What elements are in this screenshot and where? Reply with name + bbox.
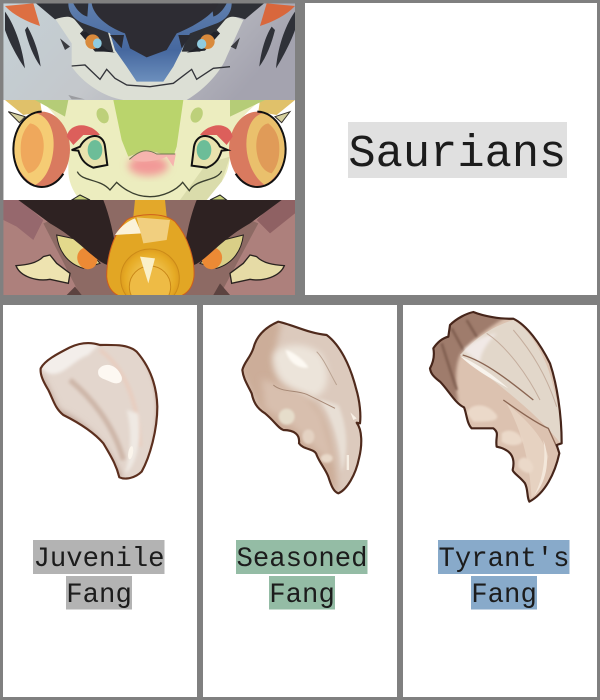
panel: juvenile fang (3, 305, 197, 697)
label: Tyrant's Fang: Tyrant's (438, 544, 570, 575)
label: Tyrant's Fang: Fang (471, 580, 537, 611)
panel: saurians title (305, 3, 597, 295)
label: Seasoned Fang (236, 540, 368, 611)
portrait: golden crest saurian (4, 200, 295, 295)
label: Tyrant's Fang (438, 540, 570, 611)
panel: seasoned fang (203, 305, 397, 697)
panel: saurian faces collage (3, 3, 295, 308)
panel: tyrant's fang (403, 305, 597, 697)
label: Juvenile Fang: Fang (66, 580, 132, 611)
portrait: green saurian (3, 100, 295, 200)
label: Seasoned Fang: Seasoned (236, 544, 368, 575)
label: Juvenile Fang: Juvenile (34, 544, 165, 575)
title: Saurians: Saurians (348, 128, 566, 180)
icon: tyrant's fang (427, 307, 567, 507)
icon: juvenile fang (40, 342, 158, 480)
label: Juvenile Fang (33, 540, 165, 611)
label: Seasoned Fang: Fang (269, 580, 335, 611)
portrait: grey blue saurian (3, 3, 295, 100)
icon: seasoned fang (238, 318, 365, 498)
